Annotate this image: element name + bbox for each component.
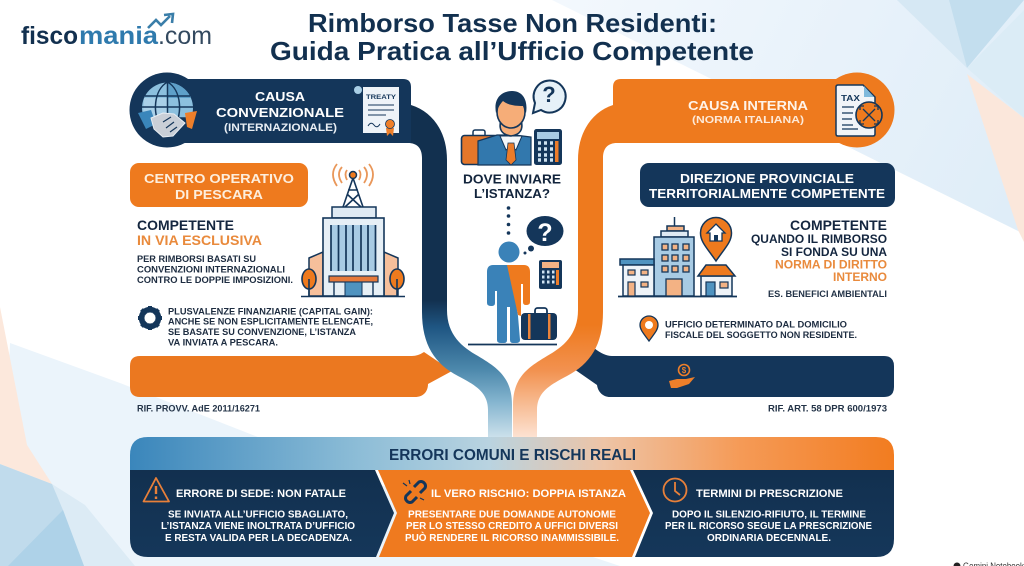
header: causa interna: CAUSA INTERNA xyxy=(688,98,809,113)
text: competente in via esclusiva xyxy=(137,217,293,286)
heading: ERRORI COMUNI E RISCHI REALI xyxy=(389,447,636,464)
title xyxy=(270,8,754,66)
card: errore di sede: L’ISTANZA VIENE INOLTRATA D’UFFICIO xyxy=(161,520,355,532)
box: direzione provinciale xyxy=(640,163,895,207)
text: dove inviare l'istanza xyxy=(463,172,561,201)
card: termini di prescrizione: DOPO IL SILENZIO-RIFIUTO, IL TERMINE xyxy=(672,508,866,520)
card: il vero rischio: PRESENTARE DUE DOMANDE AUTONOME xyxy=(408,508,616,520)
text: dove inviare l'istanza: DOVE INVIARE xyxy=(463,172,561,186)
logo xyxy=(21,14,212,50)
header: causa interna: (NORMA ITALIANA) xyxy=(692,114,804,126)
text: competente in via esclusiva: COMPETENTE xyxy=(137,217,234,233)
text: ufficio determinato xyxy=(665,320,857,341)
text: plusvalenze finanziarie xyxy=(168,306,373,348)
card: errore di sede: ERRORE DI SEDE: NON FATALE xyxy=(176,488,346,500)
card: il vero rischio: PUÒ RENDERE IL RICORSO INAMMISSIBILE. xyxy=(405,531,619,544)
icon: broken chain xyxy=(403,480,425,502)
icon: globe and handshake xyxy=(138,82,197,137)
icon: growth arrow xyxy=(148,14,173,28)
left bottom orange bar xyxy=(130,352,452,397)
logo: mania xyxy=(79,22,159,50)
card: il vero rischio: PER LO STESSO CREDITO A UFFICI DIVERSI xyxy=(406,520,618,532)
header: causa interna xyxy=(613,72,894,148)
icon: treaty document xyxy=(354,86,399,136)
card: errore di sede: E RESTA VALIDA PER LA DECADENZA. xyxy=(165,532,352,544)
text: ufficio determinato: FISCALE DEL SOGGETTO NON RESIDENTE. xyxy=(665,330,857,341)
card: termini di prescrizione: ORDINARIA DECENNALE. xyxy=(707,532,831,544)
text: competente in via esclusiva: IN VIA ESCLUSIVA xyxy=(137,232,262,248)
left ribbon xyxy=(405,105,512,437)
text: plusvalenze finanziarie: VA INVIATA A PESCARA. xyxy=(168,338,278,348)
icon: clock xyxy=(664,478,686,502)
card: termini di prescrizione: TERMINI DI PRESCRIZIONE xyxy=(696,488,843,500)
card: termini di prescrizione xyxy=(633,470,894,557)
card: errore di sede: SE INVIATA ALL’UFFICIO SBAGLIATO, xyxy=(168,508,348,520)
text: competente quando il rimborso: INTERNO xyxy=(833,270,887,284)
box: centro operativo di pescara xyxy=(130,163,308,207)
card: il vero rischio xyxy=(378,470,650,557)
icon: businessman with briefcase and calculator xyxy=(462,81,566,165)
card: errore di sede xyxy=(130,470,394,557)
text: competente quando il rimborso: SI FONDA SU UNA xyxy=(781,245,887,259)
card: il vero rischio: IL VERO RISCHIO: DOPPIA ISTANZA xyxy=(431,488,626,500)
icon: non resident person: ? xyxy=(537,219,553,247)
header: causa convenzionale: (INTERNAZIONALE) xyxy=(224,122,337,134)
icon: question speech bubble: ? xyxy=(542,82,556,107)
box: centro operativo di pescara: CENTRO OPERATIVO xyxy=(144,171,294,186)
text: competente quando il rimborso: QUANDO IL RIMBORSO xyxy=(751,232,887,246)
icon: hand with coin: $ xyxy=(682,366,687,375)
text: competente in via esclusiva: PER RIMBORSI BASATI SU xyxy=(137,254,256,265)
text: dove inviare l'istanza: L’ISTANZA? xyxy=(474,186,550,201)
text: competente in via esclusiva: CONVENZIONI INTERNAZIONALI xyxy=(137,264,285,276)
text: plusvalenze finanziarie: PLUSVALENZE FINANZIARIE (CAPITAL GAIN): xyxy=(168,306,373,318)
text: competente quando il rimborso: NORMA DI DIRITTO xyxy=(775,258,887,272)
reference: art. 58 dpr: RIF. ART. 58 DPR 600/1973 xyxy=(768,404,887,414)
title: Rimborso Tasse Non Residenti: xyxy=(308,8,717,38)
box: centro operativo di pescara: DI PESCARA xyxy=(175,187,264,202)
text: competente quando il rimborso: COMPETENTE xyxy=(790,217,887,233)
right ribbon xyxy=(513,105,620,437)
right bottom navy bar xyxy=(574,348,894,397)
reference: provv. ade: RIF. PROVV. AdE 2011/16271 xyxy=(137,404,260,414)
icon: tax document xyxy=(836,85,882,136)
icon: pescara tower building xyxy=(301,164,405,296)
icon: tax document: TAX xyxy=(841,93,860,103)
icon: location pin xyxy=(640,316,658,341)
text: ufficio determinato: UFFICIO DETERMINATO DAL DOMICILIO xyxy=(665,320,847,330)
title: Guida Pratica all’Ufficio Competente xyxy=(270,36,754,66)
box: direzione provinciale: TERRITORIALMENTE COMPETENTE xyxy=(649,186,885,201)
panel: errori comuni e rischi reali xyxy=(130,437,894,557)
header: causa convenzionale: CAUSA xyxy=(255,89,306,104)
icon: city buildings with location pin xyxy=(618,217,737,296)
logo: .com xyxy=(158,22,212,50)
header: causa convenzionale: CONVENZIONALE xyxy=(216,105,344,120)
text: competente quando il rimborso: ES. BENEFICI AMBIENTALI xyxy=(768,289,887,299)
icon: hand with coin xyxy=(669,364,695,388)
text: plusvalenze finanziarie: SE BASATE SU CONVENZIONE, L’ISTANZA xyxy=(168,327,356,338)
icon: non resident person xyxy=(468,206,564,344)
icon: treaty document: TREATY xyxy=(366,94,397,101)
text: competente in via esclusiva: CONTRO LE DOPPIE IMPOSIZIONI. xyxy=(137,275,293,286)
logo: fisco xyxy=(21,22,78,50)
card: termini di prescrizione: PER IL RICORSO SEGUE LA PRESCRIZIONE xyxy=(665,520,872,532)
icon: warning xyxy=(144,478,169,502)
text: plusvalenze finanziarie: ANCHE SE NON ESPLICITAMENTE ELENCATE, xyxy=(168,316,373,328)
text: competente quando il rimborso xyxy=(751,217,887,299)
box: direzione provinciale: DIREZIONE PROVINCIALE xyxy=(680,171,854,186)
header: causa convenzionale xyxy=(130,72,411,148)
icon: gear xyxy=(138,306,162,330)
